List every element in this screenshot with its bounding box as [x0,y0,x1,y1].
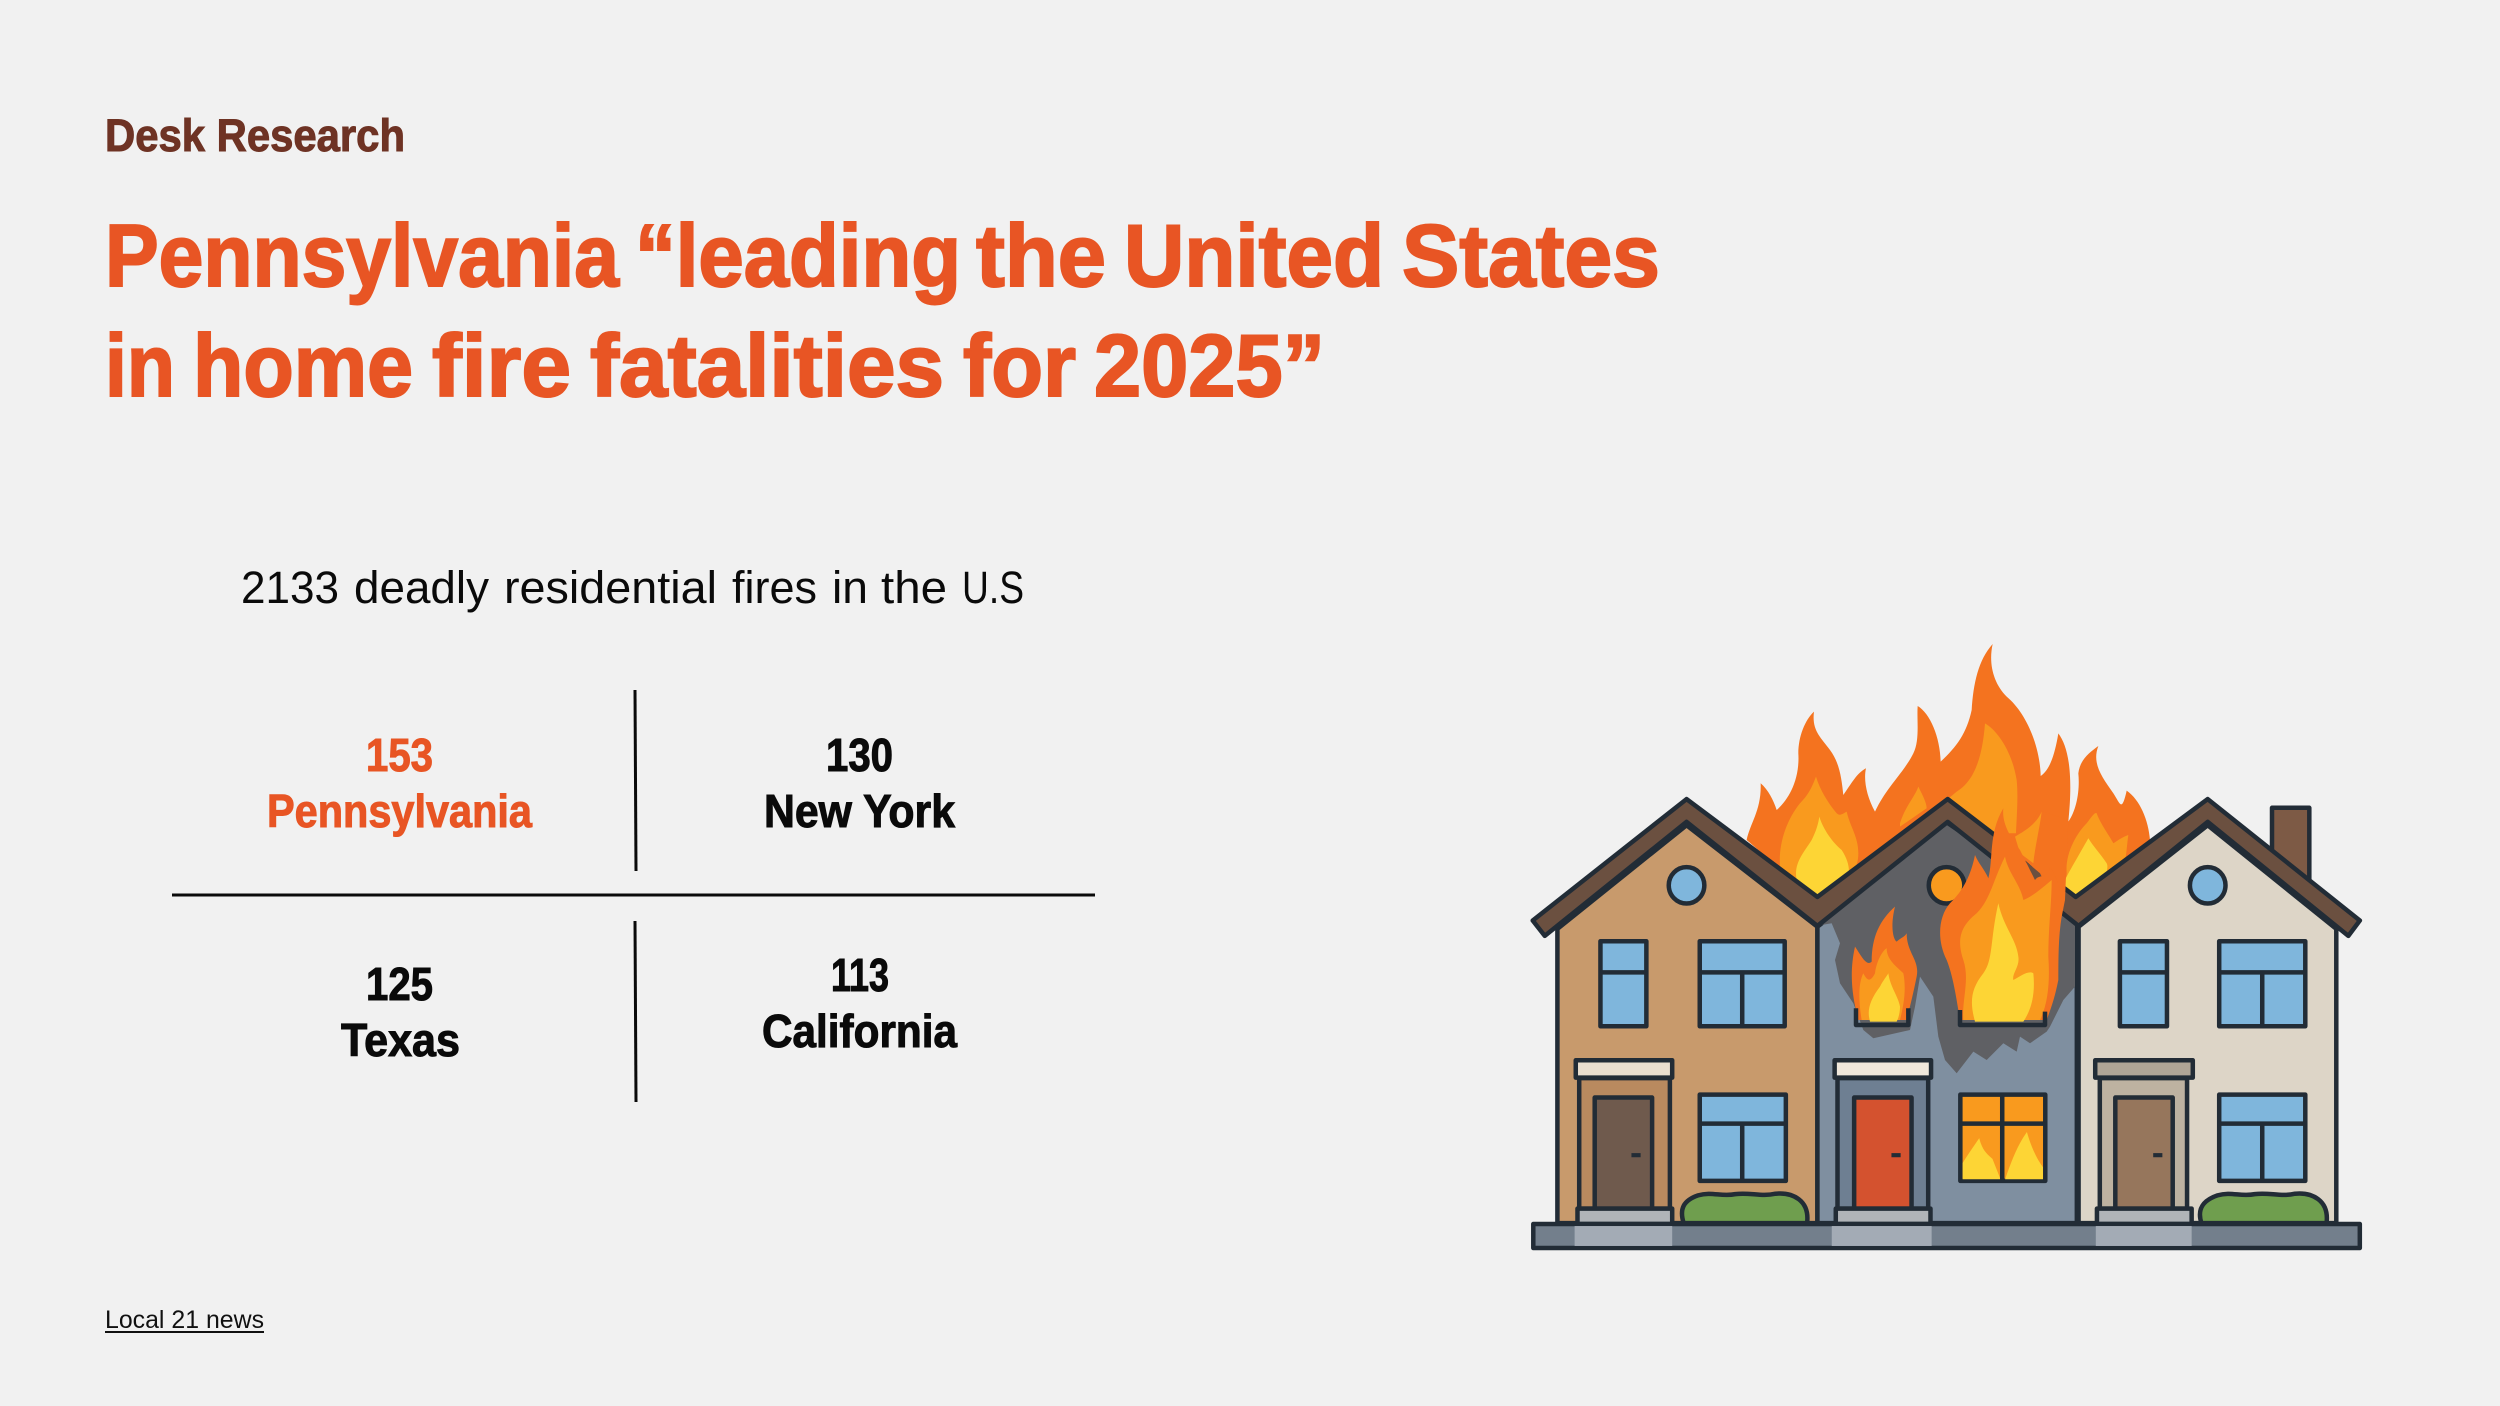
doorway [1576,1060,1672,1224]
title: home [193,316,413,415]
stats grid [172,690,1095,1102]
pavement [1533,1224,2360,1248]
stat: New York [764,729,955,837]
subtitle: residential [504,562,717,613]
bush [1682,1194,1807,1223]
stat: Texas: Texas [341,1014,460,1066]
title: “leading [635,206,961,305]
stat: Pennsylvania [267,729,532,837]
illustration: row of houses with middle house on fire [1530,644,2362,1250]
burning upper window frames [1856,1008,2045,1025]
house: right beige [2079,825,2336,1224]
flame column over roof [2017,810,2068,917]
stat: California: California [762,1005,957,1057]
subtitle: deadly [354,562,490,613]
stat: California [762,949,957,1057]
big front flame [1940,808,2062,1022]
title: 2025” [1094,316,1325,415]
subtitle [241,562,1024,613]
front flames over middle house [1852,808,2068,1028]
house: middle burning [1817,825,2077,1224]
bush [2200,1194,2327,1223]
title [105,206,1660,415]
windows [1600,941,1786,1181]
subtitle: fires [732,562,817,613]
subtitle: the [881,562,947,613]
subtitle: in [832,562,868,613]
chimney [2272,808,2309,880]
doorway [1835,1060,1931,1224]
title: for [963,316,1076,415]
round attic window glowing [1929,867,1964,904]
stat: California: 113 [831,949,889,1001]
round attic window [1669,867,1704,904]
windows [2120,941,2305,1181]
title: fatalities [590,316,944,415]
soot marks [1822,825,2075,1074]
doorway [2095,1060,2193,1224]
title: United [1124,206,1384,305]
subtitle: 2133 [241,562,339,613]
title: Pennsylvania [105,206,620,305]
title: the [976,206,1106,305]
stat: Pennsylvania: Pennsylvania [267,785,532,837]
title: States [1402,206,1660,305]
house: left tan [1557,825,1817,1224]
eyebrow heading: Desk Research [105,110,405,161]
source link: Local 21 news [105,1306,264,1334]
round attic window [2190,867,2226,904]
title: fire [432,316,571,415]
stat: New York: 130 [826,729,893,781]
back flames above roofs [1746,644,2150,894]
burning lower window [1960,1095,2045,1181]
roofline [1533,799,2360,936]
stat: Texas: 125 [366,958,433,1010]
stat: Texas [341,958,460,1066]
stat: New York: New York [764,785,955,837]
small flame [1852,907,1917,1022]
title: in [105,316,175,415]
stat: Pennsylvania: 153 [366,729,433,781]
light shard [2015,812,2042,863]
subtitle: U.S [962,562,1024,613]
